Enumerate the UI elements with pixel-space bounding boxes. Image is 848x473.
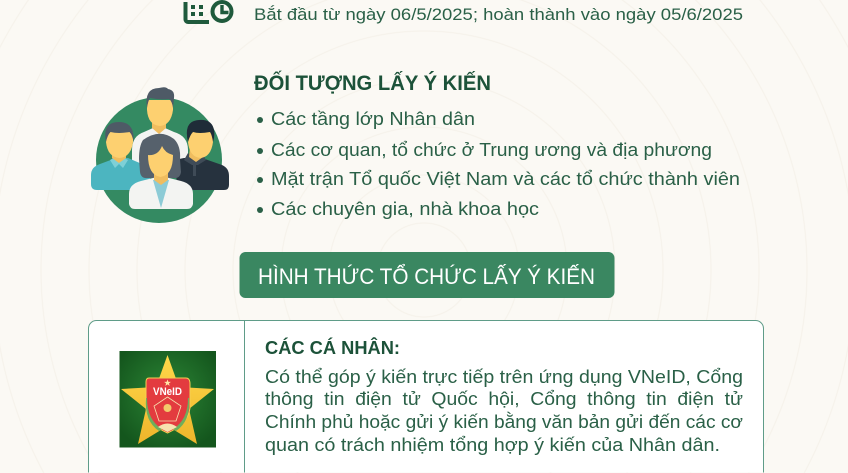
icon: group of people (91, 87, 229, 223)
heading: individuals: CÁC CÁ NHÂN: (265, 337, 400, 358)
text: individuals description: quan có trách nhiệm tổng hợp ý kiến của Nhân dân. (265, 434, 720, 455)
list: consulted subjects: Các tầng lớp Nhân dân (271, 108, 475, 129)
icon: VNeID logo: VNeID (153, 386, 182, 398)
list: consulted subjects: Mặt trận Tổ quốc Việt Nam và các tổ chức thành viên (271, 168, 740, 189)
text: time period: Bắt đầu từ ngày 06/5/2025; hoàn thành vào ngày 05/6/2025 (254, 5, 743, 24)
text: individuals description (265, 366, 743, 455)
heading: consulted subjects: ĐỐI TƯỢNG LẤY Ý KIẾN (254, 71, 491, 95)
list: consulted subjects (257, 108, 740, 219)
list: consulted subjects: Các cơ quan, tổ chức ở Trung ương và địa phương (271, 139, 712, 160)
text: individuals description: thông tin điện tử Quốc hội, Cổng thông tin điện tử (265, 388, 743, 409)
icon: VNeID logo (120, 351, 216, 448)
text: individuals description: Chính phủ hoặc gửi ý kiến bằng văn bản gửi đến các cơ (265, 411, 743, 432)
banner: forms of consultation (240, 252, 614, 298)
person: right man (174, 120, 229, 190)
icon: calendar and clock (186, 2, 232, 22)
list: consulted subjects: Các chuyên gia, nhà khoa học (271, 198, 539, 219)
person: back man (132, 87, 188, 166)
person: left man (91, 122, 150, 190)
text: individuals description: Có thể góp ý kiến trực tiếp trên ứng dụng VNeID, Cổng (265, 366, 743, 387)
banner: forms of consultation: HÌNH THỨC TỔ CHỨC LẤY Ý KIẾN (258, 264, 595, 289)
person: woman (129, 134, 193, 209)
panel: individuals (88, 320, 764, 472)
